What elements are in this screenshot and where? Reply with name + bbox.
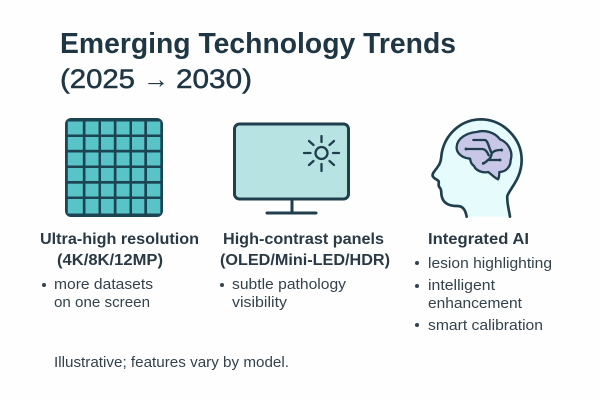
heading: High-contrast panels	[223, 231, 384, 248]
icon: head with AI brain	[433, 119, 522, 217]
heading: Ultra-high resolution	[40, 231, 199, 248]
footnote: Illustrative; features vary by model.	[54, 354, 289, 371]
bullet list: intelligent	[428, 277, 496, 294]
title: (2025	[60, 64, 135, 94]
brain with circuit lines	[457, 131, 511, 179]
bullet list: more datasets	[54, 276, 153, 293]
head silhouette	[433, 119, 522, 217]
bullet list: on one screen	[54, 294, 150, 311]
column 1: ultra-high resolution	[40, 231, 199, 311]
bullet list	[42, 276, 153, 311]
bullet list: visibility	[232, 294, 288, 311]
title: 2030)	[176, 64, 252, 94]
heading	[40, 231, 199, 269]
title: →	[143, 64, 169, 94]
column 3: integrated AI	[415, 231, 552, 334]
heading	[220, 231, 390, 269]
bullet list: subtle pathology	[232, 276, 347, 293]
bullet list: smart calibration	[428, 317, 543, 334]
heading: (4K/8K/12MP)	[57, 252, 163, 269]
column 2: high-contrast panels	[220, 231, 390, 311]
bullet list	[415, 255, 552, 334]
bullet list: lesion highlighting	[428, 255, 552, 272]
bullet list: enhancement	[428, 295, 523, 312]
icon: high-resolution pixel grid	[66, 119, 162, 216]
icon: monitor with brightness symbol	[234, 124, 348, 213]
heading: Integrated AI	[428, 231, 529, 248]
heading: (OLED/Mini-LED/HDR)	[220, 252, 390, 269]
bullet list	[220, 276, 347, 311]
title: Emerging Technology Trends	[60, 28, 456, 60]
title	[60, 28, 456, 94]
